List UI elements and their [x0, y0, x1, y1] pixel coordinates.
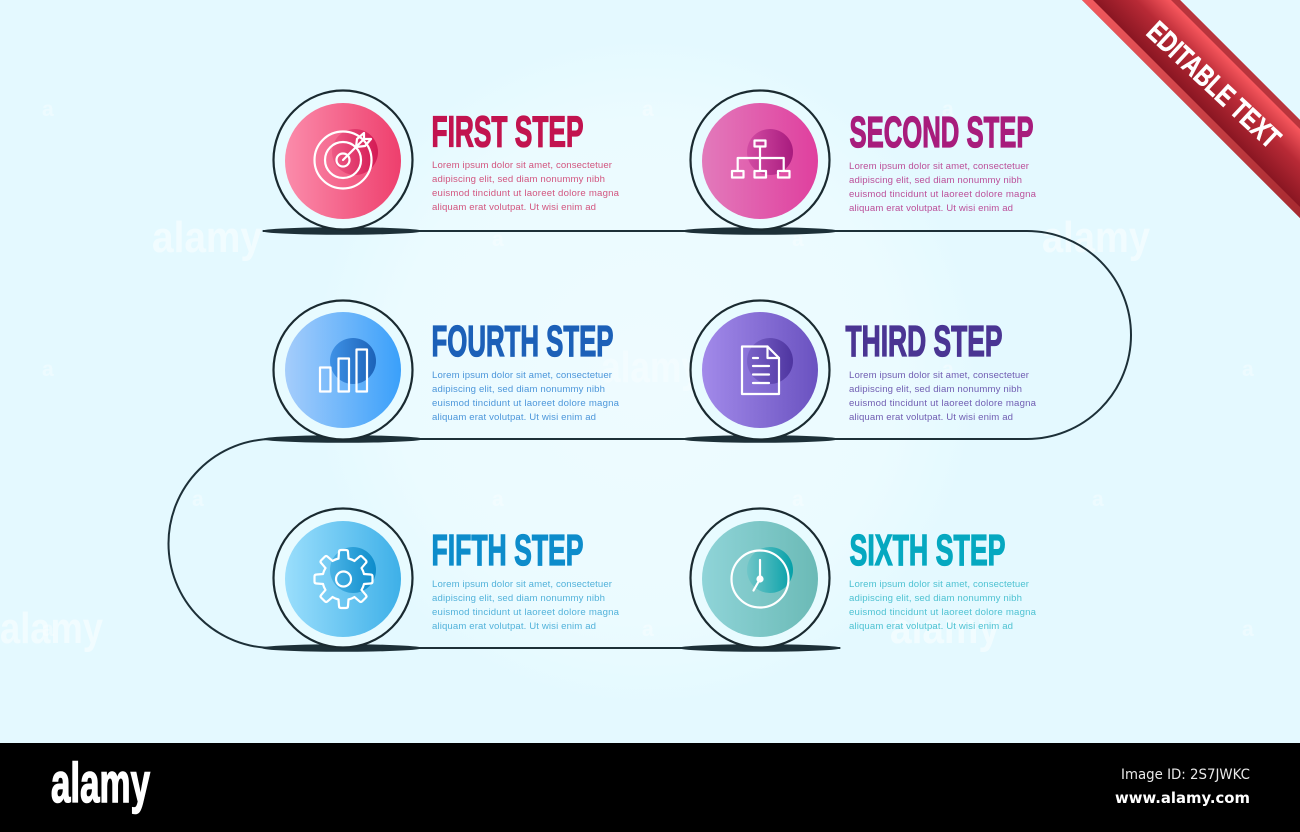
- body text: first step: aliquam erat volutpat. Ut wisi enim ad: [432, 202, 596, 213]
- icon: clock: [732, 547, 793, 608]
- ground shadow 5: [262, 644, 422, 652]
- body text: second step: [849, 161, 1037, 214]
- icon: gear: [314, 547, 376, 608]
- body text: fifth step: adipiscing elit, sed diam nonummy nibh: [432, 593, 605, 604]
- heading: third step: THIRD STEP: [846, 317, 1002, 366]
- watermarks: alamy: [601, 343, 701, 392]
- icon: bar chart: [320, 338, 376, 392]
- body text: fourth step: Lorem ipsum dolor sit amet, consectetuer: [432, 370, 613, 381]
- body text: third step: [849, 370, 1037, 423]
- body text: third step: euismod tincidunt ut laoreet dolore magna: [849, 398, 1037, 409]
- watermarks: alamy: [1042, 213, 1150, 262]
- body text: fourth step: [432, 370, 620, 423]
- footer logo: alamy: [51, 751, 150, 814]
- heading: fifth step: FIFTH STEP: [432, 526, 584, 575]
- footer band: [0, 743, 1300, 832]
- disc 4: [285, 312, 401, 428]
- body text: first step: [432, 160, 620, 213]
- body text: sixth step: adipiscing elit, sed diam nonummy nibh: [849, 593, 1022, 604]
- body text: third step: adipiscing elit, sed diam nonummy nibh: [849, 384, 1022, 395]
- body text: third step: Lorem ipsum dolor sit amet, consectetuer: [849, 370, 1030, 381]
- panel: fifth step: [262, 508, 620, 652]
- body text: fifth step: Lorem ipsum dolor sit amet, consectetuer: [432, 579, 613, 590]
- body text: first step: euismod tincidunt ut laoreet dolore magna: [432, 188, 620, 199]
- body text: second step: Lorem ipsum dolor sit amet, consectetuer: [849, 161, 1030, 172]
- disc 6: [702, 521, 818, 637]
- heading: second step: SECOND STEP: [850, 108, 1034, 157]
- panel: sixth step: [679, 508, 1037, 652]
- watermarks: a: [642, 98, 654, 121]
- ring 6: [690, 508, 830, 648]
- watermarks: a: [642, 618, 654, 641]
- panel: second step: [682, 90, 1037, 235]
- image id: Image ID: 2S7JWKC: [1121, 767, 1250, 783]
- icon: document: [742, 338, 793, 394]
- ring 1: [274, 90, 412, 230]
- heading: sixth step: SIXTH STEP: [850, 526, 1006, 575]
- watermarks: a: [792, 228, 804, 251]
- watermarks: alamy: [152, 213, 262, 262]
- watermarks: a: [1242, 358, 1254, 381]
- body text: fifth step: aliquam erat volutpat. Ut wisi enim ad: [432, 621, 596, 632]
- body text: second step: adipiscing elit, sed diam nonummy nibh: [849, 175, 1022, 186]
- body text: first step: adipiscing elit, sed diam nonummy nibh: [432, 174, 605, 185]
- body text: sixth step: Lorem ipsum dolor sit amet, consectetuer: [849, 579, 1030, 590]
- watermarks: a: [1092, 488, 1104, 511]
- ground shadow 6: [679, 644, 841, 652]
- body text: fifth step: euismod tincidunt ut laoreet dolore magna: [432, 607, 620, 618]
- body text: second step: euismod tincidunt ut laoreet dolore magna: [849, 189, 1037, 200]
- watermarks: a: [1242, 618, 1254, 641]
- watermarks: a: [42, 98, 54, 121]
- watermarks: a: [42, 358, 54, 381]
- panel: first step: [262, 90, 620, 235]
- panel: fourth step: [263, 300, 620, 443]
- disc 3: [702, 312, 818, 428]
- ring 5: [274, 508, 412, 648]
- watermarks: a: [1242, 98, 1254, 121]
- body text: sixth step: euismod tincidunt ut laoreet dolore magna: [849, 607, 1037, 618]
- panel: third step: [682, 300, 1037, 443]
- watermarks: a: [42, 618, 54, 641]
- background glow: [310, 37, 980, 707]
- watermarks: a: [192, 488, 204, 511]
- disc 5: [285, 521, 401, 637]
- body text: fifth step: [432, 579, 620, 632]
- watermarks: a: [942, 358, 954, 381]
- website: www.alamy.com: [1115, 789, 1250, 807]
- watermarks: a: [792, 488, 804, 511]
- body text: fourth step: adipiscing elit, sed diam nonummy nibh: [432, 384, 605, 395]
- watermarks: alamy: [890, 604, 1000, 653]
- disc 1: [285, 103, 401, 219]
- connector path: [168, 231, 1131, 648]
- watermarks: a: [492, 488, 504, 511]
- icon: target: [314, 129, 378, 188]
- ring 2: [690, 90, 830, 230]
- body text: third step: aliquam erat volutpat. Ut wisi enim ad: [849, 412, 1013, 423]
- body text: first step: Lorem ipsum dolor sit amet, consectetuer: [432, 160, 613, 171]
- ground shadow 4: [263, 435, 423, 443]
- body text: fourth step: euismod tincidunt ut laoreet dolore magna: [432, 398, 620, 409]
- icon: org chart: [732, 129, 793, 178]
- heading: fourth step: FOURTH STEP: [432, 317, 614, 366]
- heading: first step: FIRST STEP: [432, 108, 584, 156]
- body text: fourth step: aliquam erat volutpat. Ut wisi enim ad: [432, 412, 596, 423]
- watermarks: [0, 98, 1254, 653]
- watermarks: a: [942, 98, 954, 121]
- ring 4: [274, 300, 412, 440]
- ground shadow 1: [262, 227, 422, 235]
- ring 3: [690, 300, 830, 440]
- body text: second step: aliquam erat volutpat. Ut wisi enim ad: [849, 203, 1013, 214]
- disc 2: [702, 103, 818, 219]
- watermarks: alamy: [0, 604, 103, 653]
- ground shadow 3: [682, 435, 838, 443]
- watermarks: a: [492, 228, 504, 251]
- body text: sixth step: [849, 579, 1037, 632]
- ribbon: editable text: [1082, 0, 1300, 218]
- ground shadow 2: [682, 227, 838, 235]
- body text: sixth step: aliquam erat volutpat. Ut wisi enim ad: [849, 621, 1013, 632]
